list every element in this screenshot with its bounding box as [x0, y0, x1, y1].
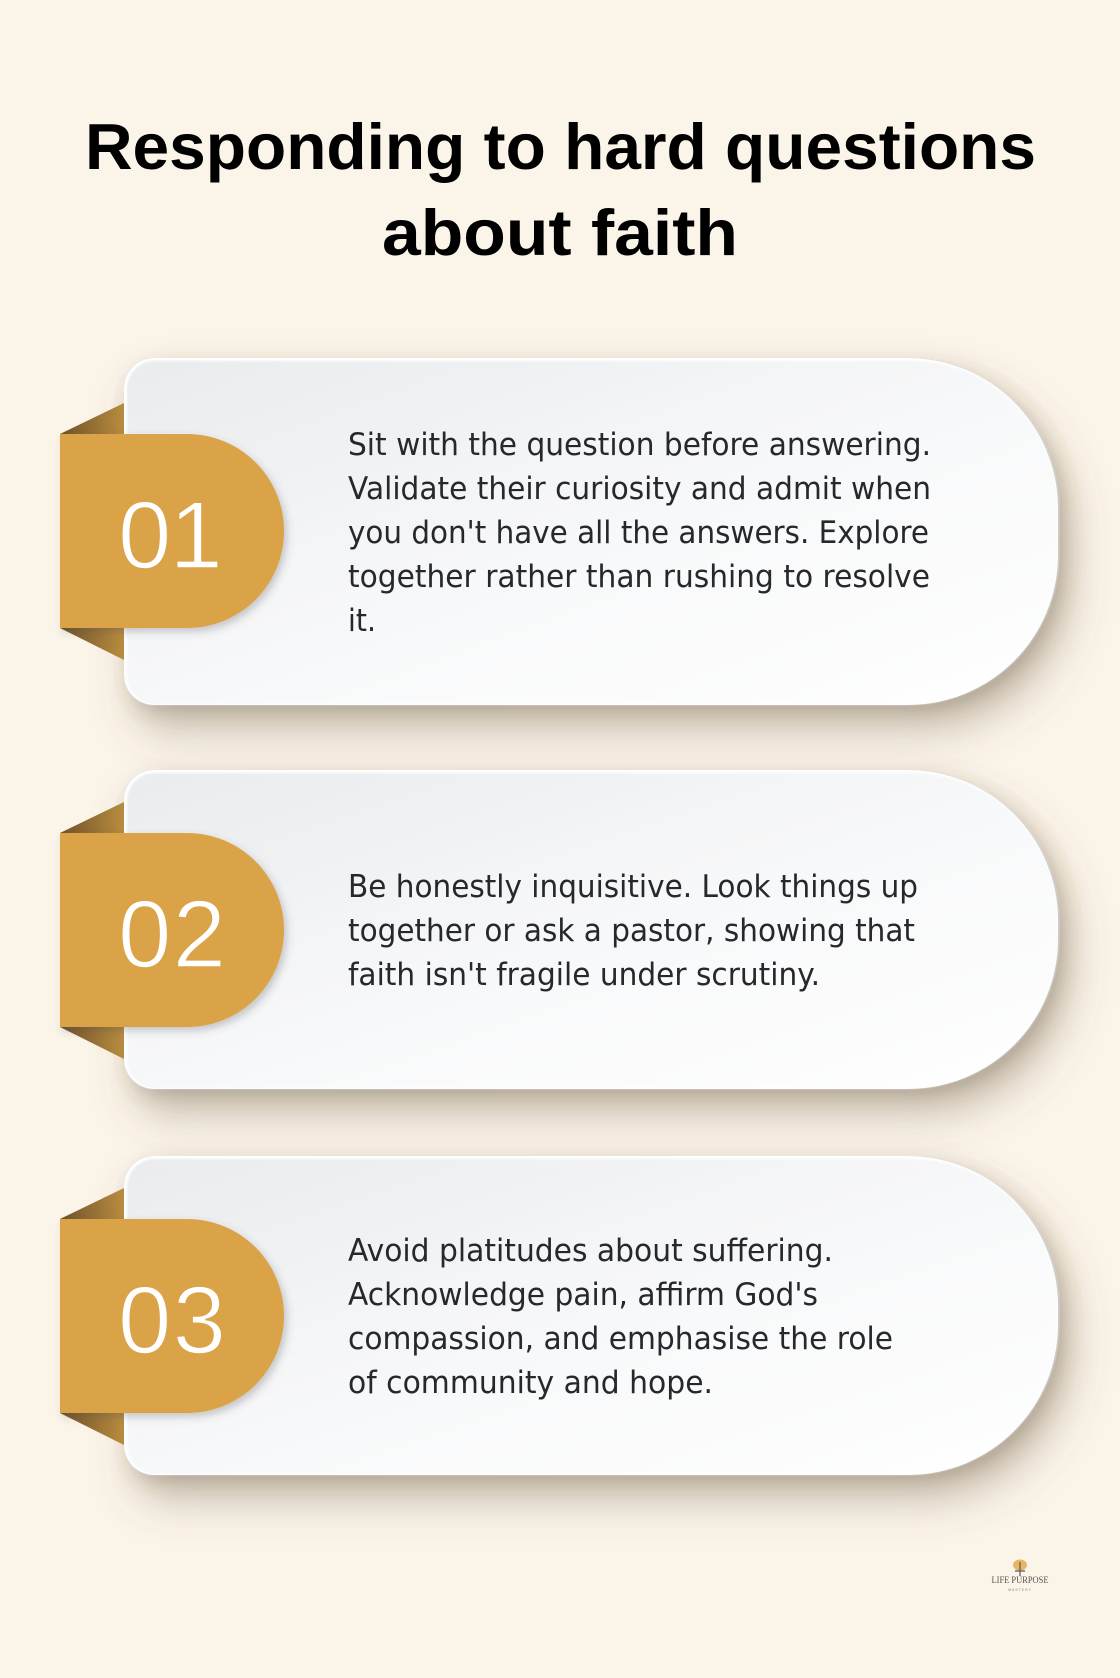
text 01: you don't have all the answers. Explore [348, 515, 929, 551]
text 01: Sit with the question before answering. [348, 427, 931, 463]
panel: step 03 [60, 1156, 1058, 1475]
text 01: it. [348, 603, 376, 639]
text 02: faith isn't fragile under scrutiny. [348, 957, 820, 993]
text 02: Be honestly inquisitive. Look things up [348, 869, 918, 905]
title: Responding to hard questions [85, 110, 1036, 183]
panel: step 01 [60, 358, 1058, 705]
logo: MASTERY [1008, 1588, 1032, 1592]
logo: LIFE PURPOSE [992, 1575, 1049, 1585]
card 03 [124, 1156, 1058, 1475]
text 02 [348, 869, 918, 993]
logo [992, 1560, 1049, 1592]
text 01: Validate their curiosity and admit when [348, 471, 931, 507]
text 03 [348, 1233, 893, 1401]
icon: tree [1013, 1560, 1027, 1576]
ribbon folds 02 [60, 802, 124, 1059]
text 01: together rather than rushing to resolve [348, 559, 930, 595]
title: about faith [382, 196, 738, 269]
ribbon folds 01 [60, 403, 124, 660]
text 02: together or ask a pastor, showing that [348, 913, 915, 949]
text 03: compassion, and emphasise the role [348, 1321, 893, 1357]
text 03: Acknowledge pain, affirm God's [348, 1277, 818, 1313]
number 02: 02 [118, 881, 226, 988]
number 01: 01 [118, 482, 221, 589]
number badge 02 [60, 833, 284, 1027]
card 01 [124, 358, 1058, 705]
number badge 03 [60, 1219, 284, 1413]
panel: step 02 [60, 770, 1058, 1089]
text 01 [348, 427, 931, 639]
title [85, 110, 1036, 269]
ribbon folds 03 [60, 1188, 124, 1445]
card 02 [124, 770, 1058, 1089]
number badge 01 [60, 434, 284, 628]
text 03: of community and hope. [348, 1365, 713, 1401]
text 03: Avoid platitudes about suffering. [348, 1233, 833, 1269]
number 03: 03 [118, 1267, 226, 1374]
